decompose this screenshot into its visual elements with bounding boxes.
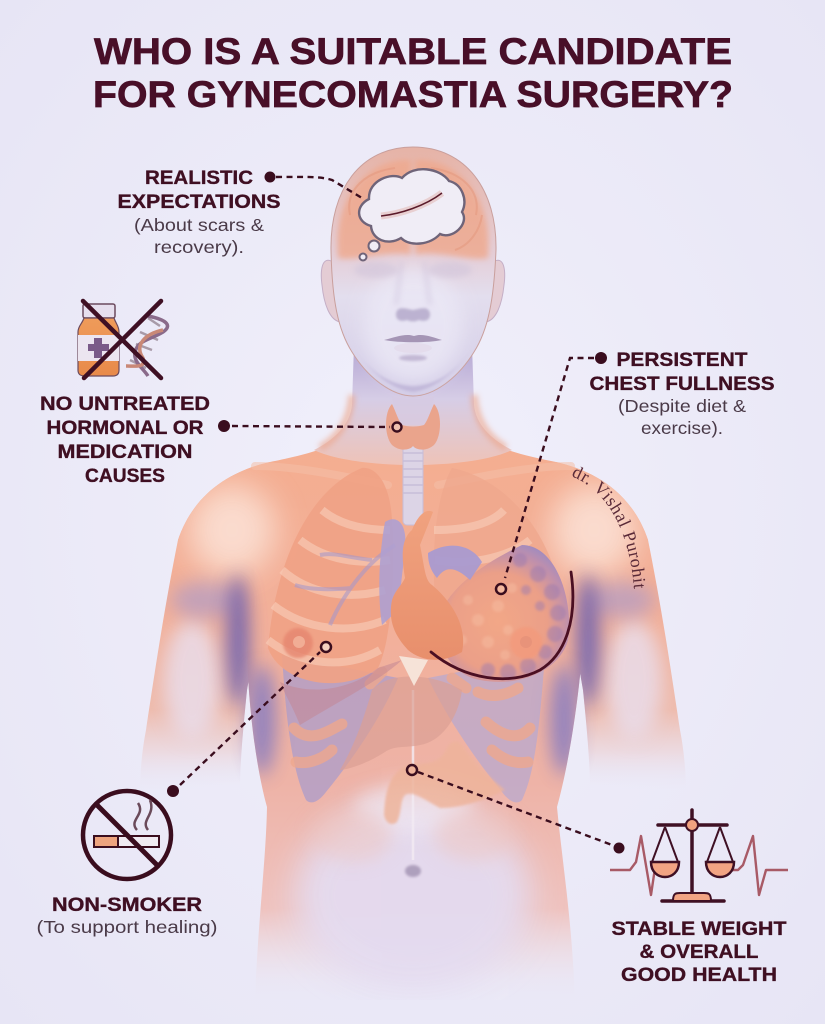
label: non-smoker (36, 894, 218, 937)
neck (314, 345, 512, 465)
label: realistic expectations: recovery). (154, 237, 244, 257)
nipple left of image (283, 628, 313, 658)
human figure with anatomy (140, 147, 686, 1000)
lung shadow (280, 660, 402, 725)
label: stable weight: & OVERALL (640, 941, 759, 963)
label: realistic expectations: (About scars & (134, 215, 264, 235)
label: stable weight: GOOD HEALTH (621, 964, 777, 986)
title (93, 31, 733, 115)
enlarged breast (438, 545, 569, 682)
nipple right of image (510, 627, 542, 659)
label: persistent chest fullness: exercise). (641, 418, 723, 438)
navel (405, 865, 421, 877)
leader: hormonal (218, 420, 402, 432)
leader: non-smoker (167, 642, 331, 797)
label: non-smoker: (To support healing) (36, 917, 218, 937)
label: no untreated (40, 393, 210, 487)
trachea (403, 445, 423, 525)
arms (140, 462, 280, 790)
sternum (399, 656, 428, 686)
label: no untreated: CAUSES (85, 465, 165, 487)
body shading (164, 484, 662, 990)
title: FOR GYNECOMASTIA SURGERY? (93, 74, 733, 115)
ribs (268, 510, 530, 662)
bronchi (295, 545, 395, 625)
label: no untreated: NO UNTREATED (40, 393, 210, 415)
thought cloud with scar (359, 169, 464, 260)
linea alba (412, 690, 414, 860)
thyroid (386, 404, 440, 450)
icon: medication and DNA crossed out (78, 301, 168, 378)
title: WHO IS A SUITABLE CANDIDATE (94, 31, 732, 72)
head (331, 147, 496, 396)
leader: chest fullness (496, 352, 607, 594)
leader: stable weight (407, 765, 624, 854)
label: realistic expectations (118, 167, 280, 257)
label: stable weight: STABLE WEIGHT (612, 918, 787, 940)
pulmonary vessels (379, 519, 405, 625)
watermark signature: dr. Vishal Purohit (572, 466, 646, 589)
face (352, 262, 474, 392)
lung outline on right side of image (434, 468, 556, 677)
leader: realistic expectations (264, 172, 362, 198)
label: no untreated: MEDICATION (58, 441, 192, 463)
brain (337, 160, 411, 259)
icon: no smoking (83, 791, 171, 879)
label: persistent chest fullness: CHEST FULLNESS (590, 373, 774, 395)
neck edge tint (320, 395, 506, 448)
label: realistic expectations: REALISTIC (145, 167, 253, 189)
liver (340, 676, 462, 770)
icon: balance scale with heartbeat (610, 810, 788, 901)
torso (178, 425, 648, 1000)
clavicles (255, 466, 571, 485)
label: stable weight (612, 918, 787, 986)
lower rib cage (282, 655, 545, 802)
larynx (392, 396, 434, 425)
label: persistent chest fullness: (Despite diet & (618, 396, 746, 416)
label: persistent chest fullness: PERSISTENT (616, 349, 748, 371)
label: non-smoker: NON-SMOKER (52, 894, 202, 916)
label: no untreated: HORMONAL OR (46, 417, 204, 439)
ears (321, 260, 505, 322)
fold line under breast (431, 572, 573, 679)
breast lobules (481, 553, 566, 680)
label: persistent chest fullness (590, 349, 774, 438)
label: realistic expectations: EXPECTATIONS (118, 191, 280, 213)
stomach (384, 741, 505, 824)
heart (391, 511, 463, 660)
lung on left side of image (268, 468, 393, 683)
